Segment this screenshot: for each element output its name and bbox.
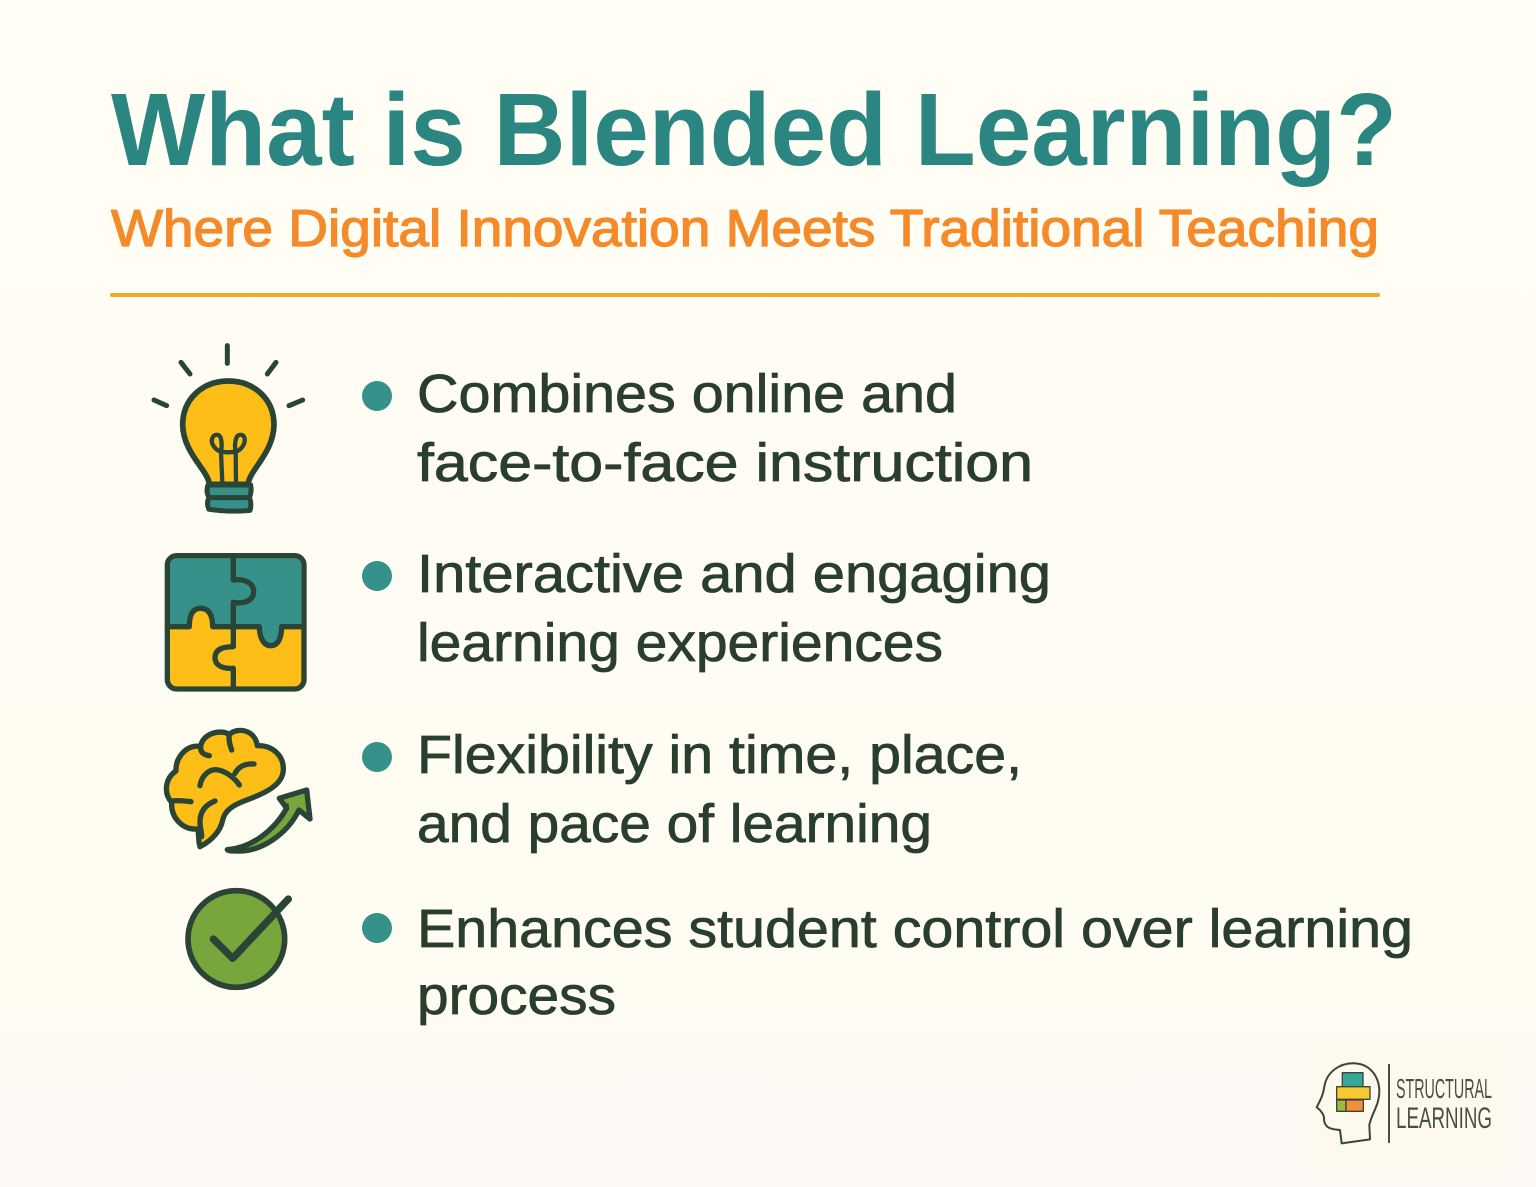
logo icon: head [1317,1063,1379,1143]
item 1: Combines online and [417,364,957,424]
item 1 [362,364,1033,493]
icon: check circle [188,891,288,987]
subtitle: Where Digital Innovation Meets Traditional Teaching [111,200,1379,258]
logo: Structural Learning [1306,1040,1506,1171]
title: What is Blended Learning? [111,72,1397,187]
item 3 [362,725,1022,854]
item 3: and pace of learning [417,794,932,854]
item 2: learning experiences [417,613,943,673]
item 4: process [417,966,616,1026]
logo divider [1388,1064,1390,1143]
bullet list [362,364,1413,1026]
header divider [110,293,1380,297]
brain [166,730,283,847]
arrow [227,790,310,851]
item 4: Enhances student control over learning [417,899,1413,959]
icon: puzzle [167,556,304,689]
item 2 [362,544,1051,673]
item 4 [362,899,1413,1026]
icon: light bulb [154,346,303,511]
icon: brain with arrow [166,730,310,851]
item 1: face-to-face instruction [417,433,1033,493]
item 2: Interactive and engaging [417,544,1051,604]
item 3: Flexibility in time, place, [417,725,1022,785]
